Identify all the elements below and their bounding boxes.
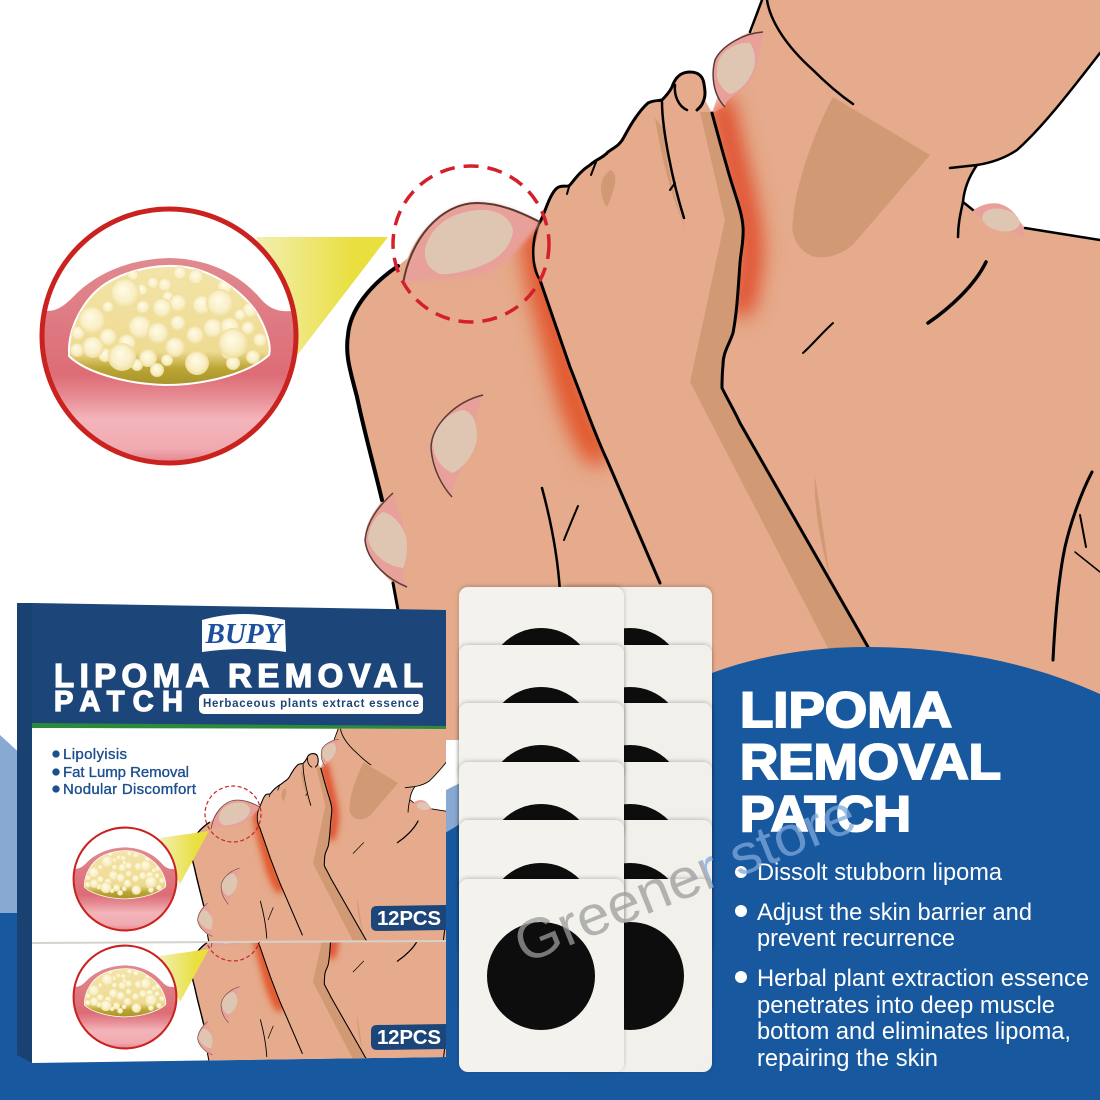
lower dashed circle — [206, 942, 260, 962]
subtitle pill — [199, 694, 423, 714]
box benefit list: Nodular Discomfort — [63, 781, 197, 798]
upper panel illustration — [192, 728, 446, 942]
green strip — [32, 723, 446, 730]
box title — [54, 657, 423, 718]
lower 12PCS tag: 12PCS — [377, 1026, 441, 1049]
benefits list: bottom and eliminates lipoma, — [757, 1018, 1071, 1045]
patch stacks — [459, 587, 712, 1072]
seam between boxes — [32, 940, 446, 944]
box benefit list — [52, 746, 197, 798]
upper 12PCS tag: 12PCS — [377, 907, 441, 930]
box title: LIPOMA REMOVAL — [54, 657, 423, 694]
benefits list: Herbal plant extraction essence — [757, 965, 1089, 992]
background blue shapes — [0, 647, 1100, 1100]
benefits list: Dissolt stubborn lipoma — [757, 859, 1003, 886]
left column patches — [459, 587, 624, 1072]
logo: BUPY — [204, 618, 284, 650]
illustration: neck and shoulder with lipoma lumps — [347, 0, 1100, 740]
panel white — [32, 728, 446, 1063]
benefits list: repairing the skin — [757, 1045, 938, 1072]
box benefit list: Lipolyisis — [63, 746, 127, 763]
benefits list: penetrates into deep muscle — [757, 992, 1055, 1019]
lower panel illustration — [192, 942, 446, 1060]
lower lens — [69, 946, 182, 1051]
headline: REMOVAL — [740, 734, 1001, 790]
yellow magnifier beam — [256, 237, 388, 358]
dashed highlight circle — [393, 166, 549, 322]
lower beam — [160, 949, 209, 1002]
box title: PATCH — [54, 686, 183, 718]
benefits list: Adjust the skin barrier and — [757, 899, 1032, 926]
headline: PATCH — [740, 786, 911, 842]
watermark: Greener store — [505, 781, 864, 975]
box benefit list: Fat Lump Removal — [63, 764, 189, 781]
magnified lipoma lens — [30, 209, 310, 470]
upper lens — [69, 828, 182, 933]
upper beam — [160, 831, 209, 884]
benefits list: prevent recurrence — [757, 925, 955, 952]
headline: LIPOMA — [740, 682, 952, 738]
product box — [17, 603, 446, 1063]
benefits list — [735, 859, 1089, 1072]
subtitle pill: Herbaceous plants extract essence — [203, 698, 419, 710]
headline — [740, 682, 1001, 842]
right column patches — [560, 587, 712, 1072]
upper dashed circle — [205, 786, 261, 842]
box header — [32, 603, 446, 727]
box spine — [17, 603, 32, 1063]
